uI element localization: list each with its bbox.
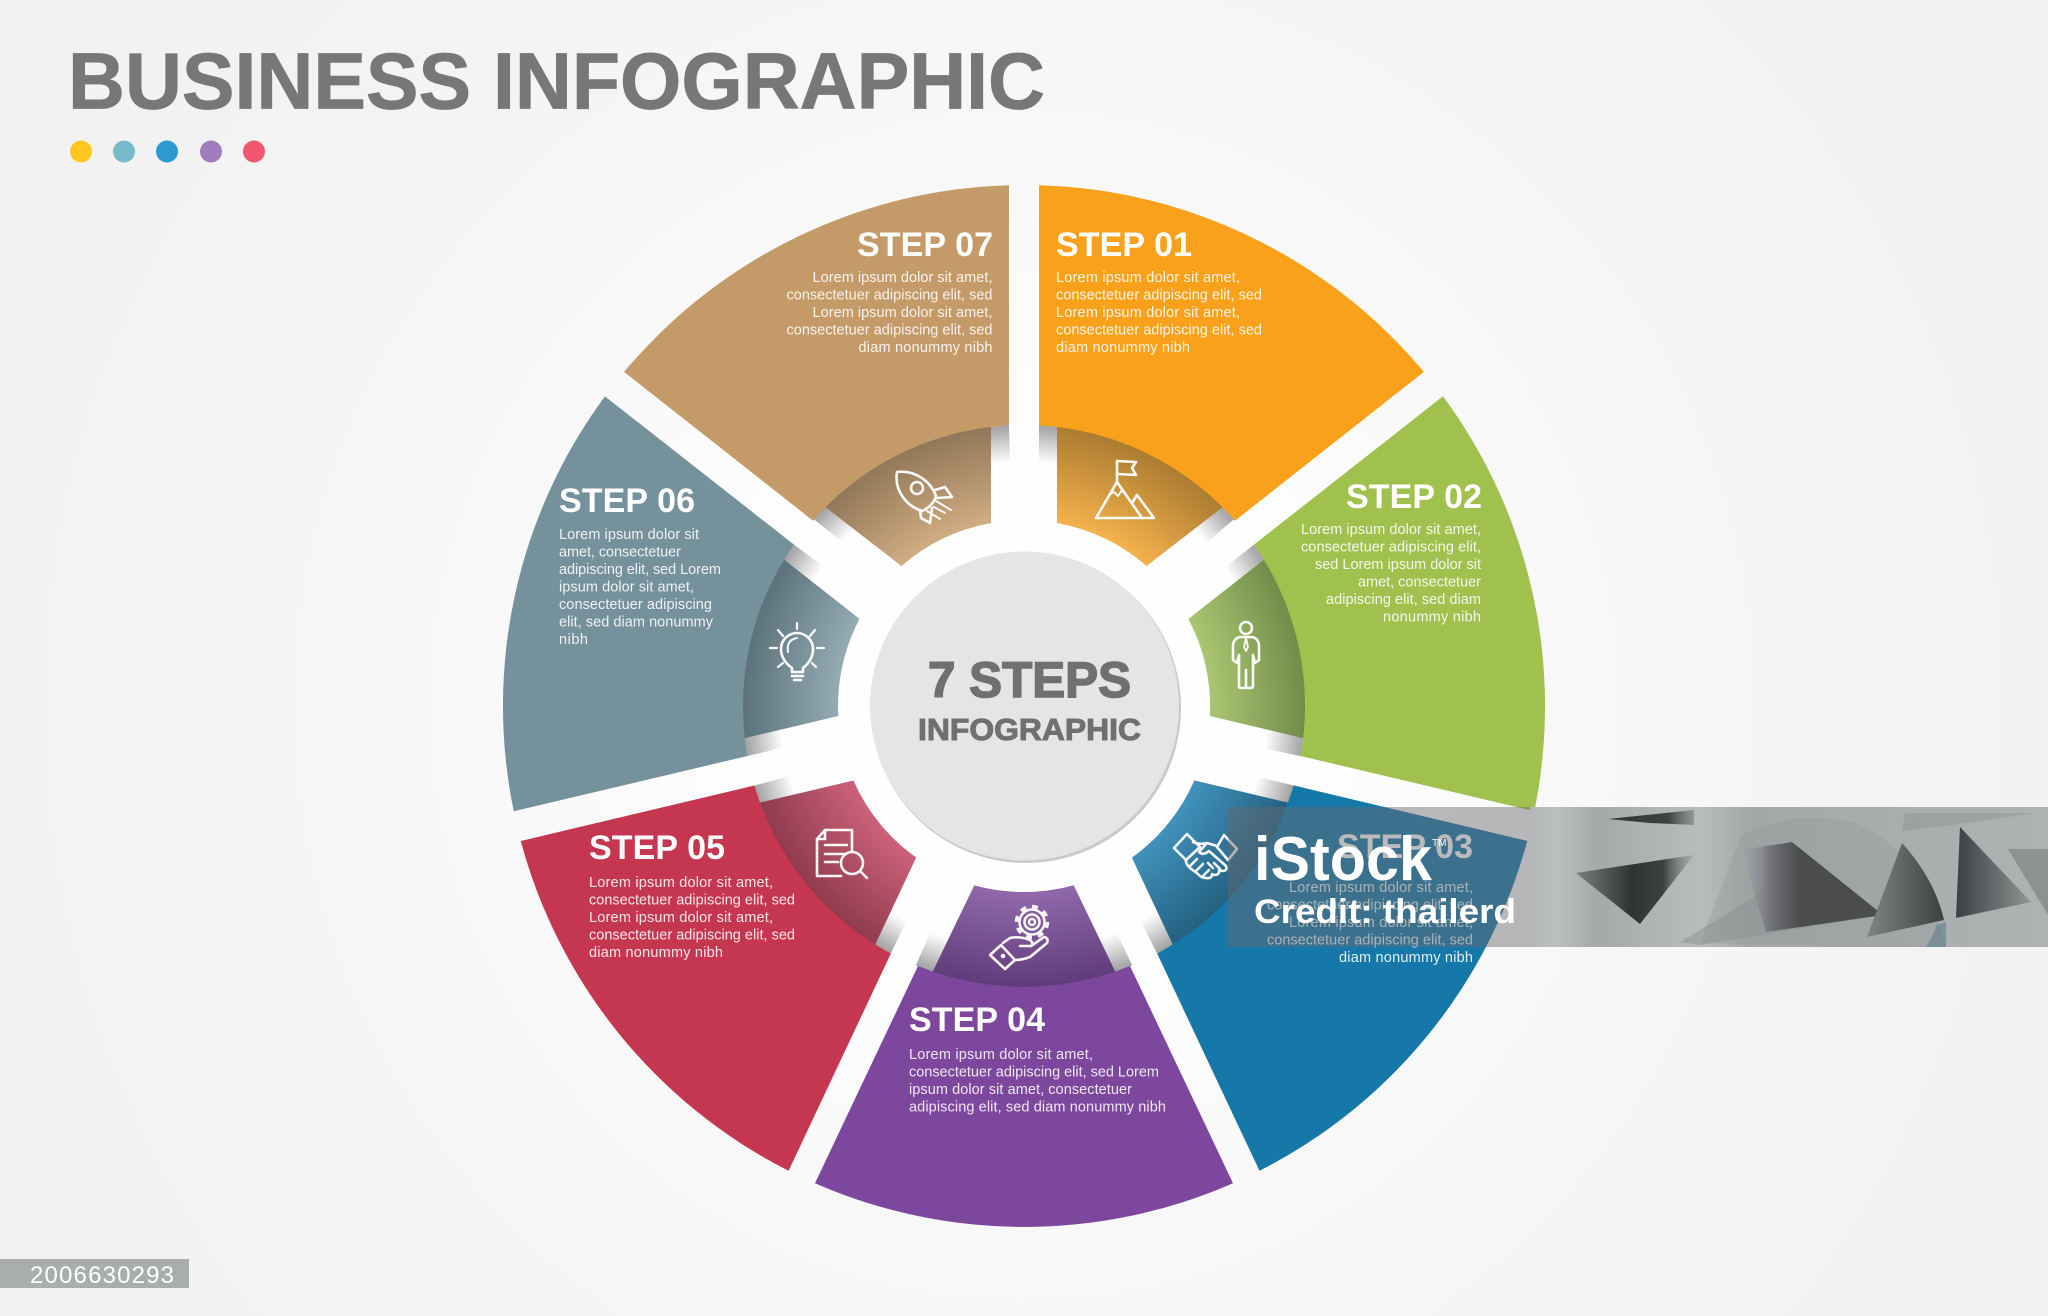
wedge: step 01 [1039, 185, 1424, 566]
image id tag [0, 1259, 189, 1289]
icon: handshake [1174, 834, 1237, 878]
text: step 03: consectetuer adipiscing elit, sed [1267, 932, 1473, 948]
heading: step 06: STEP 06 [559, 482, 695, 520]
text: step 06: Lorem ipsum dolor sit [559, 527, 699, 543]
text: step 02: adipiscing elit, sed diam [1326, 592, 1481, 608]
panel: step 03 [1068, 753, 1527, 1213]
title: BUSINESS INFOGRAPHIC [68, 36, 1045, 126]
panel: step 02 [1143, 396, 1679, 933]
text: step 02: nonummy nibh [1383, 610, 1481, 626]
panel: step 06 [426, 351, 884, 811]
heading: step 01: STEP 01 [1056, 226, 1192, 264]
text: step 02: consectetuer adipiscing elit, [1301, 540, 1481, 556]
text: step 06: adipiscing elit, sed Lorem [559, 562, 721, 578]
text: step 05 [589, 875, 795, 961]
text: step 02: Lorem ipsum dolor sit amet, [1301, 522, 1481, 538]
text: step 06: ipsum dolor sit amet, [559, 580, 694, 596]
wedge: step 07 [624, 185, 1032, 596]
heading: step 05: STEP 05 [589, 829, 725, 867]
text: step 06: amet, consectetuer [559, 544, 681, 560]
text: step 03: Lorem ipsum dolor sit amet, [1289, 915, 1473, 931]
panel: step 05 [442, 663, 951, 1171]
text: step 07: Lorem ipsum dolor sit amet, [812, 305, 992, 321]
text: step 01: consectetuer adipiscing elit, sed [1056, 322, 1262, 338]
icon: document with magnifier [817, 830, 867, 878]
text: step 03: consectetuer adipiscing elit, sed [1267, 898, 1473, 914]
heading: step 02: STEP 02 [1346, 478, 1482, 516]
text: step 06: elit, sed diam nonummy [559, 614, 714, 630]
text: step 02: sed Lorem ipsum dolor sit [1315, 557, 1481, 573]
text: step 01: diam nonummy nibh [1056, 340, 1190, 356]
text: step 07: consectetuer adipiscing elit, sed [786, 322, 992, 338]
text: step 03: diam nonummy nibh [1339, 950, 1473, 966]
panel: step 07 [624, 185, 1032, 596]
image id tag: 2006630293 [30, 1262, 174, 1289]
text: step 04: adipiscing elit, sed diam nonummy nibh [909, 1100, 1166, 1116]
text: step 01: Lorem ipsum dolor sit amet, [1056, 305, 1240, 321]
centre circle [870, 552, 1181, 863]
text: step 03 [1267, 880, 1473, 966]
text: step 06 [559, 527, 721, 648]
colour dots [70, 140, 265, 162]
icon: rocket [897, 472, 952, 523]
text: step 01: Lorem ipsum dolor sit amet, [1056, 270, 1240, 286]
centre subheading: INFOGRAPHIC [918, 712, 1141, 747]
text: step 04: ipsum dolor sit amet, consectetuer [909, 1082, 1132, 1098]
heading: step 04: STEP 04 [909, 1001, 1045, 1039]
watermark brand: iStock [1254, 825, 1432, 894]
text: step 02 [1301, 522, 1481, 626]
text: step 07 [786, 270, 992, 356]
text: step 05: Lorem ipsum dolor sit amet, [589, 910, 773, 926]
text: step 04: Lorem ipsum dolor sit amet, [909, 1047, 1093, 1063]
text: step 04 [909, 1047, 1166, 1116]
wedge: step 06 [426, 351, 884, 811]
text: step 07: consectetuer adipiscing elit, sed [786, 288, 992, 304]
centre heading: 7 STEPS [928, 652, 1131, 708]
text: step 01: consectetuer adipiscing elit, sed [1056, 288, 1262, 304]
text: step 06: consectetuer adipiscing [559, 597, 712, 613]
text: step 07: diam nonummy nibh [858, 340, 992, 356]
text: step 05: consectetuer adipiscing elit, sed [589, 892, 795, 908]
wedge: step 05 [442, 663, 951, 1171]
wedge: step 02 [1143, 396, 1679, 933]
text: step 05: consectetuer adipiscing elit, sed [589, 928, 795, 944]
heading: step 03: STEP 03 [1337, 828, 1473, 866]
text: step 07: Lorem ipsum dolor sit amet, [812, 270, 992, 286]
panel: step 01 [1039, 185, 1424, 566]
text: step 04: consectetuer adipiscing elit, sed Lorem [909, 1064, 1159, 1080]
icon: hand holding gear [990, 906, 1048, 969]
text: step 03: Lorem ipsum dolor sit amet, [1289, 880, 1473, 896]
text: step 06: nibh [559, 632, 588, 648]
wedge: step 04 [815, 846, 1233, 1227]
watermark trademark: TM [1432, 838, 1446, 849]
text: step 01 [1056, 270, 1262, 356]
text: step 05: Lorem ipsum dolor sit amet, [589, 875, 773, 891]
heading: step 07: STEP 07 [857, 226, 993, 264]
icon: business person [1233, 622, 1259, 688]
wedge: step 03 [1068, 753, 1527, 1213]
icon: mountain flag [1096, 461, 1154, 518]
panel: step 04 [815, 846, 1233, 1227]
icon: light bulb [770, 623, 824, 680]
text: step 02: amet, consectetuer [1358, 574, 1481, 590]
watermark band [1228, 807, 2048, 947]
text: step 05: diam nonummy nibh [589, 945, 723, 961]
watermark credit: Credit: thailerd [1254, 893, 1516, 931]
